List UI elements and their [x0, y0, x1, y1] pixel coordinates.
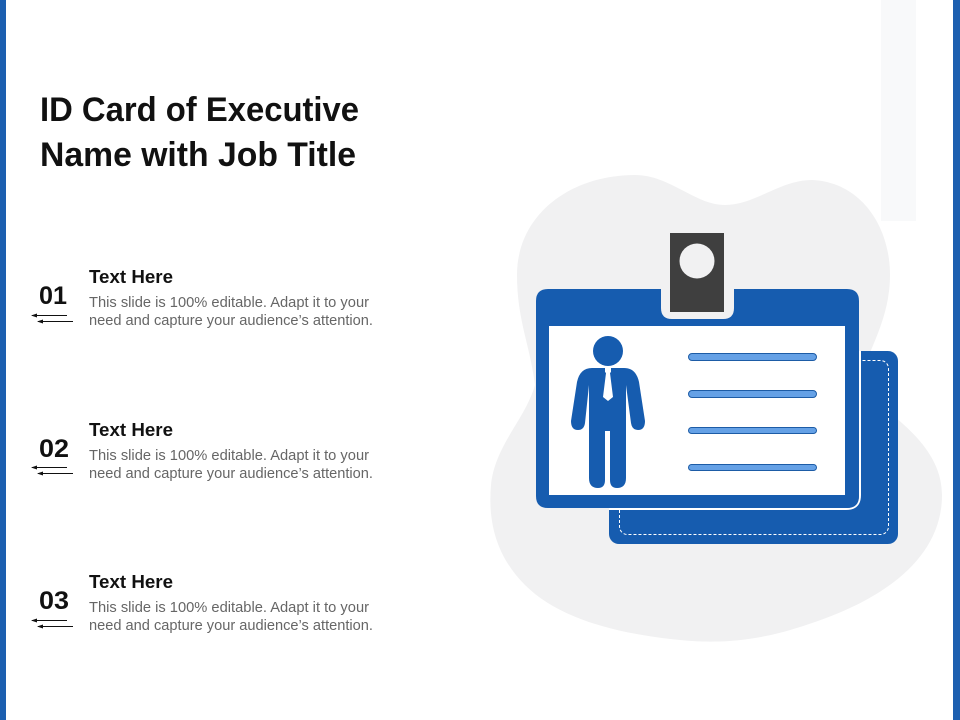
body 01: need and capture your audience’s attention. — [89, 313, 373, 329]
body 03: need and capture your audience’s attention. — [89, 618, 373, 634]
title — [40, 91, 359, 174]
body 02: This slide is 100% editable. Adapt it to your — [89, 448, 369, 464]
list item 03 — [31, 572, 373, 634]
title: ID Card of Executive — [40, 91, 359, 129]
background blob — [490, 175, 942, 642]
heading 02: Text Here — [89, 420, 173, 440]
heading 03: Text Here — [89, 572, 173, 592]
list item 02 — [31, 420, 373, 482]
arrows 01 — [31, 314, 73, 324]
body 01 — [89, 295, 373, 329]
ID card illustration — [536, 233, 898, 544]
tie — [603, 368, 613, 401]
number 02: 02 — [39, 435, 69, 463]
info lines — [688, 354, 816, 470]
body 03 — [89, 600, 373, 634]
list item 01 — [31, 267, 373, 329]
body 02 — [89, 448, 373, 482]
front card — [536, 289, 859, 508]
arrows 03 — [31, 618, 73, 628]
arrows 02 — [31, 466, 73, 476]
body 02: need and capture your audience’s attention. — [89, 466, 373, 482]
white card edge — [609, 351, 860, 509]
title: Name with Job Title — [40, 136, 356, 174]
number 01: 01 — [39, 282, 67, 310]
back card — [609, 351, 898, 544]
heading 01: Text Here — [89, 267, 173, 287]
clip — [670, 233, 724, 312]
body 01: This slide is 100% editable. Adapt it to your — [89, 295, 369, 311]
number 03: 03 — [39, 587, 69, 615]
card window — [549, 326, 845, 495]
person icon — [571, 336, 645, 488]
body 03: This slide is 100% editable. Adapt it to your — [89, 600, 369, 616]
